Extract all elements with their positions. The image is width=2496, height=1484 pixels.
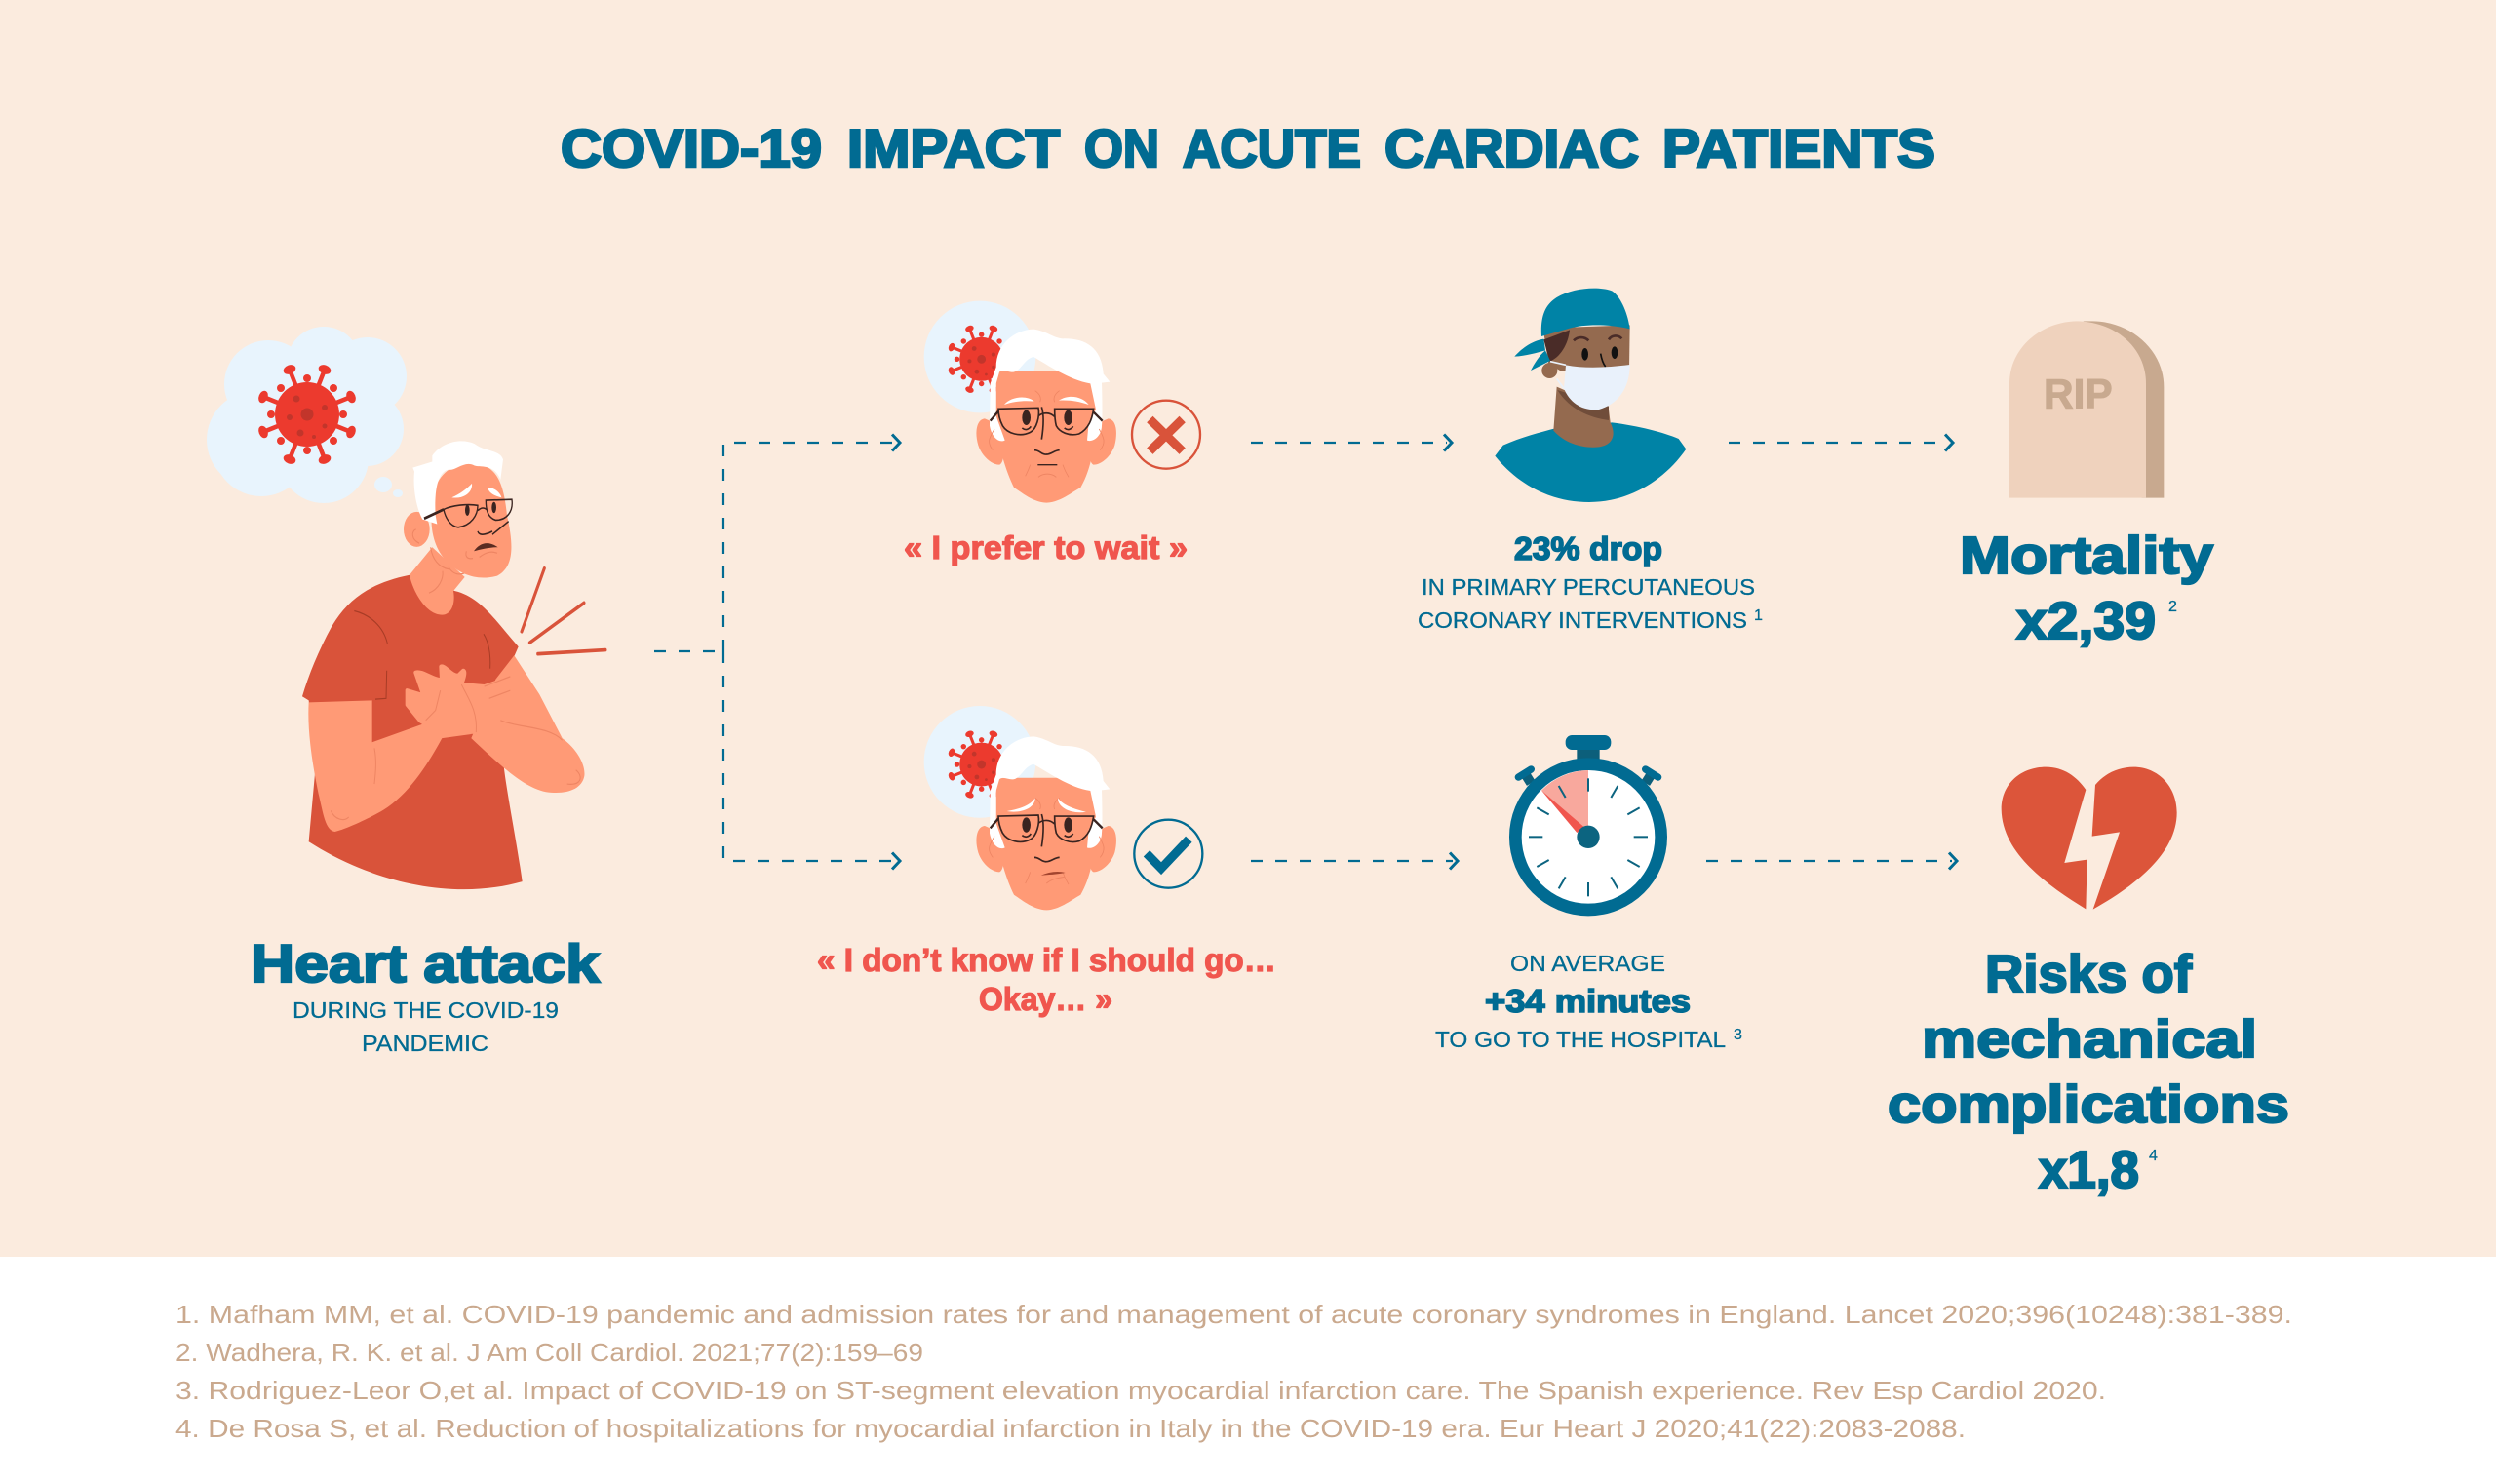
description: primary percutaneous coronary interventions: IN PRIMARY PERCUTANEOUS	[1422, 574, 1755, 600]
quote: I don't know if I should go: « I don’t know if I should go…	[817, 942, 1276, 978]
title: ACUTE	[1183, 118, 1361, 178]
panel: PCI drop	[1418, 289, 1763, 633]
heading: mortality: Mortality	[1960, 527, 2213, 585]
stat: x1,8: x1,8	[2039, 1141, 2139, 1199]
text: to go to the hospital: TO GO TO THE HOSPITAL	[1435, 1027, 1726, 1052]
title: PATIENTS	[1662, 118, 1935, 178]
arrow: branching connector	[654, 435, 900, 870]
stat: +34 minutes: +34 minutes	[1485, 983, 1691, 1019]
illustration: man holding chest	[302, 441, 584, 889]
panel: patient hesitates	[817, 706, 1276, 1017]
title	[561, 118, 1935, 178]
icon: tombstone: RIP	[2044, 371, 2113, 417]
references: 1. Mafham MM, et al. COVID-19 pandemic and admission rates for and management of acute coronary syndromes in England. Lancet 2020;396(10248):381-389.	[176, 1300, 2292, 1329]
heading: risks of mechanical complications: complications	[1888, 1075, 2289, 1134]
references: 2. Wadhera, R. K. et al. J Am Coll Cardiol. 2021;77(2):159–69	[176, 1338, 923, 1367]
icon: blue check	[1134, 820, 1202, 888]
heading: risks of mechanical complications: Risks of	[1985, 945, 2193, 1003]
panel: mortality	[1960, 321, 2213, 650]
illustration: surgeon with mask	[1495, 289, 1686, 502]
panel: patient prefers to wait	[904, 301, 1200, 566]
subtext: during the pandemic: DURING THE COVID-19	[292, 997, 559, 1023]
heading: risks of mechanical complications: mechanical	[1922, 1010, 2257, 1069]
title: COVID-19	[561, 118, 822, 178]
heading: heart attack: Heart attack	[251, 933, 600, 994]
stat: x1,8: 4	[2149, 1148, 2158, 1164]
title: CARDIAC	[1384, 118, 1639, 178]
description: primary percutaneous coronary interventions: 1	[1754, 607, 1763, 624]
arrow: wait to surgeon	[1251, 435, 1452, 450]
icon: red cross	[1132, 401, 1200, 469]
text: to go to the hospital: 3	[1734, 1027, 1742, 1043]
heading: risks of mechanical complications	[1888, 945, 2289, 1134]
arrow: stopwatch to broken heart	[1706, 852, 1957, 870]
stat: x2,39: x2,39	[2016, 592, 2156, 650]
pain lines	[522, 568, 605, 654]
description: primary percutaneous coronary interventions	[1418, 574, 1763, 633]
quote: I prefer to wait: « I prefer to wait »	[904, 529, 1188, 566]
references: 3. Rodriguez-Leor O,et al. Impact of COVID-19 on ST-segment elevation myocardial infarction care. The Spanish experience. Rev Esp Cardiol 2020.	[176, 1376, 2106, 1405]
thought cloud with virus	[207, 327, 407, 503]
text: on average: ON AVERAGE	[1510, 951, 1665, 976]
arrow: surgeon to mortality	[1729, 435, 1953, 450]
icon: stopwatch	[1509, 735, 1667, 916]
references	[176, 1300, 2292, 1443]
arrow: hesitation to stopwatch	[1251, 852, 1458, 870]
panel: mechanical complications	[1888, 767, 2289, 1199]
stat: 23% drop: 23% drop	[1514, 530, 1662, 566]
subtext: during the pandemic: PANDEMIC	[362, 1031, 488, 1056]
illustration: worried face with virus	[924, 301, 1116, 503]
quote: I don't know if I should go: Okay… »	[979, 981, 1112, 1017]
subtext: during the pandemic	[292, 997, 559, 1056]
panel: heart attack patient	[207, 327, 605, 1056]
title: IMPACT	[847, 118, 1060, 178]
illustration: anxious face with virus	[924, 706, 1116, 910]
title: ON	[1084, 118, 1159, 178]
icon: broken heart	[2002, 767, 2177, 910]
quote: I don't know if I should go	[817, 942, 1276, 1017]
references: 4. De Rosa S, et al. Reduction of hospitalizations for myocardial infarction in Italy in the COVID-19 era. Eur Heart J 2020;41(22):2083-2088.	[176, 1414, 1966, 1443]
panel: delay	[1435, 735, 1742, 1052]
stat: x2,39: 2	[2168, 599, 2177, 615]
icon: tombstone	[2009, 321, 2164, 498]
description: primary percutaneous coronary interventions: CORONARY INTERVENTIONS	[1418, 607, 1747, 633]
references panel background	[0, 1257, 2496, 1484]
